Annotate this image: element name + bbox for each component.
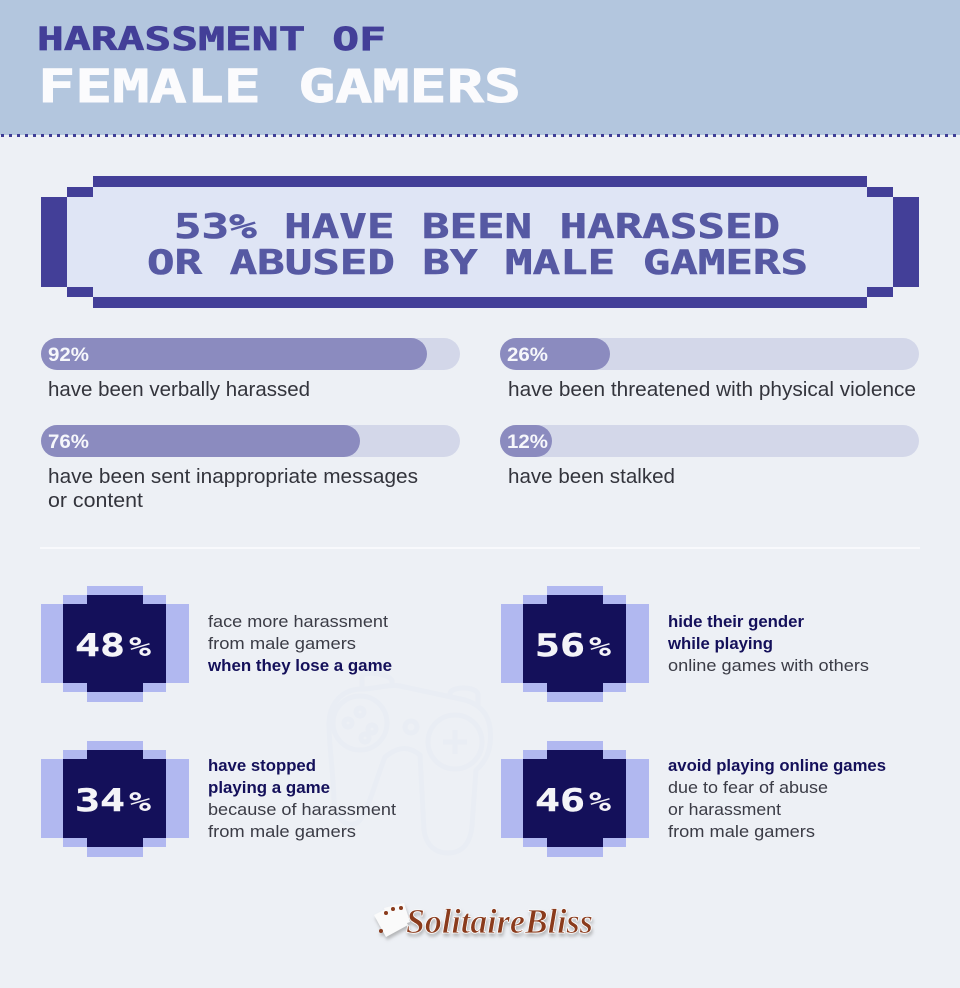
title line 1: HARASSMENT OF <box>37 20 386 58</box>
stat: 48% <box>41 586 392 702</box>
stat: 34%: from male gamers <box>208 822 356 841</box>
headline pixel frame <box>41 176 919 308</box>
stat: 56%: 56 <box>535 628 585 664</box>
pixel badge <box>501 741 649 857</box>
stat: 46%: from male gamers <box>668 822 815 841</box>
stat: 56%: hide their gender <box>668 612 804 631</box>
pixel badge <box>41 586 189 702</box>
headline pixel frame: OR ABUSED BY MALE GAMERS <box>147 243 808 283</box>
stat: 46%: due to fear of abuse <box>668 778 828 797</box>
stat: 46%: avoid playing online games <box>668 756 886 775</box>
stat bar: 92% verbally harassed: 92% <box>48 345 89 366</box>
stat bar: 76% inappropriate messages: have been sent inappropriate messages <box>48 465 418 488</box>
icon: playing cards <box>374 903 410 937</box>
stat: 48%: from male gamers <box>208 634 356 653</box>
stat: 46%: 46 <box>535 783 585 819</box>
stat: 34%: because of harassment <box>208 800 396 819</box>
stat bar: 76% inappropriate messages <box>41 425 460 512</box>
logo: Solitaire Bliss: SolitaireBliss <box>406 902 593 941</box>
stat bar: 12% stalked: 12% <box>507 432 548 453</box>
stat: 34%: playing a game <box>208 778 330 797</box>
stat: 46% <box>501 741 886 857</box>
stat bar: 92% verbally harassed <box>41 338 460 401</box>
stat bar: 12% stalked <box>500 425 919 488</box>
stat: 48%: when they lose a game <box>207 656 392 675</box>
stat bar: 92% verbally harassed: have been verbally harassed <box>48 378 310 401</box>
icon: game controller watermark <box>329 673 490 853</box>
stat: 46%: or harassment <box>668 800 781 819</box>
pixel badge <box>501 586 649 702</box>
stat: 48%: 48 <box>75 628 125 664</box>
headline text: 53% HAVE BEEN HARASSED <box>174 207 780 247</box>
stat: 48%: face more harassment <box>208 612 388 631</box>
stat: 34%: 34 <box>75 783 125 819</box>
stat: 34%: have stopped <box>208 756 316 775</box>
stat bar: 26% threatened: have been threatened with physical violence <box>508 378 916 401</box>
stat: 56%: online games with others <box>668 656 869 675</box>
stat bar: 26% threatened: 26% <box>507 345 548 366</box>
stat: 34% <box>41 741 396 857</box>
stat: 34%: % <box>129 787 152 818</box>
stat bar: 76% inappropriate messages: 76% <box>48 432 89 453</box>
stat bar: 26% threatened <box>500 338 919 401</box>
title line 2: FEMALE GAMERS <box>38 60 521 113</box>
header banner <box>0 0 960 136</box>
pixel badge <box>41 741 189 857</box>
stat: 46%: % <box>589 787 612 818</box>
stat: 56%: % <box>589 632 612 663</box>
stat: 56%: while playing <box>667 634 773 653</box>
stat bar: 12% stalked: have been stalked <box>508 465 675 488</box>
stat: 56% <box>501 586 869 702</box>
stat: 48%: % <box>129 632 152 663</box>
stat bar: 76% inappropriate messages: or content <box>48 489 143 512</box>
